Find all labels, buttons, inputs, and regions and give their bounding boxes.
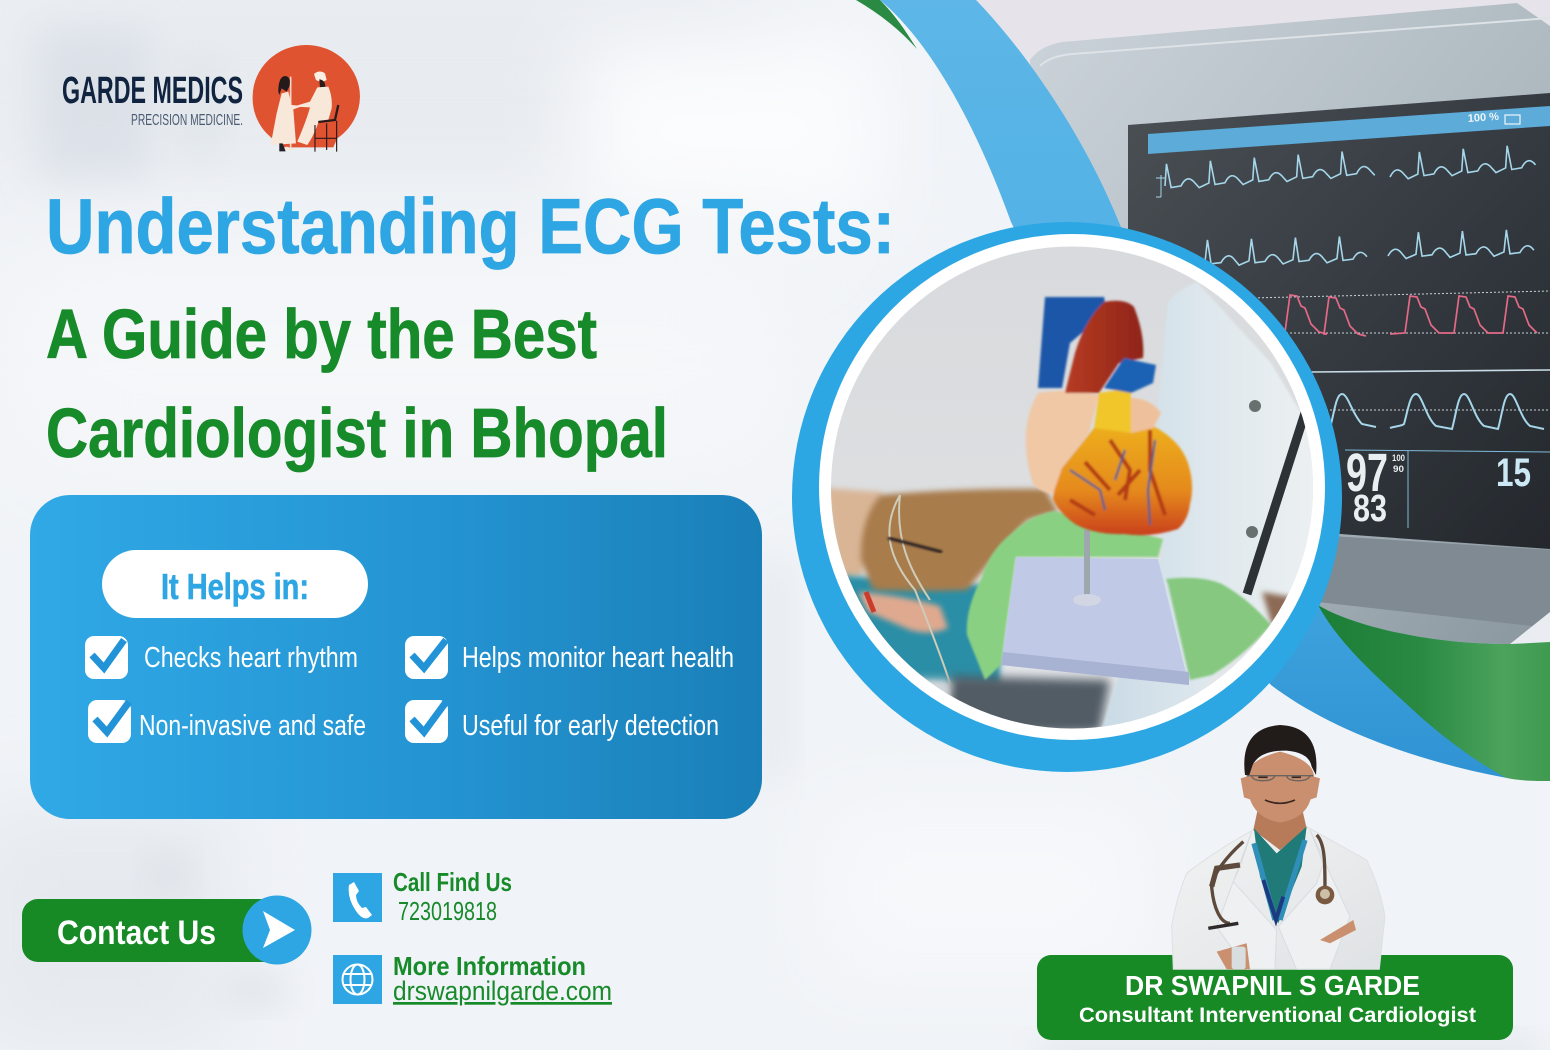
glasses: [1247, 776, 1313, 781]
monitor readouts: 100: [1392, 453, 1405, 463]
white ring: [819, 234, 1325, 740]
crossed arms: [1320, 920, 1356, 943]
arrow icon: [242, 896, 312, 964]
ECG trace row 2: [1204, 229, 1534, 266]
decorative swoosh: green top: [856, 0, 917, 49]
title line 1: Understanding ECG Tests:: [46, 182, 895, 270]
item: checks heart rhythm: [85, 636, 358, 679]
doctor role: Consultant Interventional Cardiologist: [1079, 1004, 1476, 1027]
electrode cable: [889, 495, 955, 700]
item: useful for early detection: Useful for early detection: [462, 710, 719, 742]
patient hand: [858, 592, 948, 633]
circle photo: heart model: [792, 222, 1342, 772]
item: helps monitor heart health: [405, 636, 734, 679]
pill heading: It Helps in:: [161, 566, 309, 607]
eyes and mouth: [1258, 777, 1301, 803]
call block: Call Find Us: [393, 867, 512, 897]
respiration trace: [1310, 370, 1550, 429]
monitor readouts: 90: [1393, 464, 1404, 474]
lapels: [1217, 830, 1350, 969]
coat: [1172, 827, 1385, 969]
call block: 723019818: [398, 896, 497, 926]
monitor readouts: 97: [1346, 443, 1388, 503]
dark floor: [945, 676, 1110, 735]
item: helps monitor heart health: Helps monitor heart health: [462, 642, 734, 674]
heart stand: [1084, 530, 1090, 597]
patient monitor photo: [960, 0, 1550, 650]
patient arm: [826, 488, 882, 580]
website block: [333, 951, 612, 1006]
monitor bezel: [1030, 3, 1550, 650]
logo emblem: [253, 45, 360, 152]
doctor name: DR SWAPNIL S GARDE: [1125, 970, 1420, 1001]
monitor status strip: 100 %: [1467, 111, 1500, 125]
panel: it helps in: [30, 495, 762, 819]
heart: [1026, 297, 1192, 535]
stethoscope: [1212, 835, 1325, 923]
title line 3: Cardiologist in Bhopal: [46, 394, 668, 472]
contact button: Contact Us: [57, 914, 216, 952]
name plate: [1037, 955, 1513, 1040]
hair: [1244, 725, 1316, 775]
ECG trace row 1: [1156, 144, 1536, 197]
website block: More Information: [393, 951, 586, 981]
strap: [1247, 413, 1305, 594]
shirt: [1254, 827, 1307, 923]
monitor readouts: 15: [1496, 451, 1531, 495]
right glove: [1166, 578, 1271, 680]
patient shirt: [861, 489, 1058, 591]
decorative swoosh: green bottom: [1318, 605, 1550, 781]
bed: [835, 575, 1000, 685]
heart model base: [1001, 557, 1189, 685]
monitor status strip: [1148, 106, 1550, 154]
title: [46, 182, 895, 472]
pill heading: [102, 550, 368, 618]
monitor readouts: 83: [1353, 488, 1387, 530]
face: [1241, 752, 1320, 823]
item: checks heart rhythm: Checks heart rhythm: [144, 642, 358, 674]
contact button: [22, 896, 312, 964]
arterial pressure trace: [1250, 291, 1550, 336]
item: useful for early detection: [405, 700, 719, 743]
monitor readouts: [1345, 443, 1550, 530]
decorative swoosh: blue crescent: [880, 0, 1550, 778]
logo: [62, 45, 360, 152]
arm right: [1259, 588, 1289, 626]
doctor portrait: [1172, 725, 1385, 969]
monitor corner: [1510, 612, 1550, 644]
icon: globe: [333, 955, 382, 1004]
monitor screen: [1128, 93, 1550, 549]
item: non-invasive and safe: Non-invasive and safe: [139, 710, 366, 742]
title line 2: A Guide by the Best: [46, 295, 597, 373]
left glove: [967, 511, 1163, 680]
coat: [1100, 282, 1325, 735]
neck: [1253, 807, 1307, 850]
item: non-invasive and safe: [88, 700, 366, 743]
blue ring: [792, 222, 1342, 772]
icon: phone: [333, 873, 382, 922]
website block: drswapnilgarde.com: [393, 976, 612, 1006]
logo wordmark: GARDE MEDICS: [62, 70, 243, 112]
logo tagline: PRECISION MEDICINE.: [131, 112, 243, 129]
call block: [333, 867, 512, 926]
